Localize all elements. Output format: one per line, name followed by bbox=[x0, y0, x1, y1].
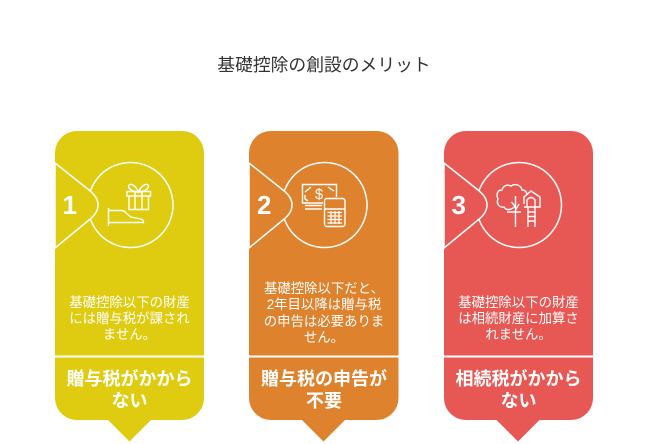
description 1: 基礎控除以下の財産 bbox=[69, 294, 190, 310]
description 3: 基礎控除以下の財産 bbox=[458, 294, 579, 310]
description 2 bbox=[264, 281, 384, 345]
number 3: 3 bbox=[452, 190, 466, 220]
description 3 bbox=[458, 294, 579, 342]
heading 3 bbox=[456, 368, 582, 411]
description 2: の申告は必要ありま bbox=[264, 314, 384, 329]
number 2: 2 bbox=[257, 190, 271, 220]
description 3: は相続財産に加算さ bbox=[458, 311, 579, 326]
heading 2: 不要 bbox=[306, 391, 342, 411]
heading 1: 贈与税がかから bbox=[66, 368, 192, 388]
heading 1 bbox=[66, 368, 192, 411]
number 1: 1 bbox=[62, 190, 77, 220]
icon: dollar sign: $ bbox=[315, 186, 324, 203]
icon: gift on hand bbox=[108, 184, 150, 226]
description 1: には贈与税が課され bbox=[69, 311, 190, 326]
icon: money and calculator bbox=[302, 184, 345, 226]
heading 3: ない bbox=[500, 391, 536, 411]
heading 2 bbox=[261, 368, 387, 411]
title: 基礎控除の創設のメリット bbox=[217, 55, 431, 75]
description 3: れません。 bbox=[485, 327, 552, 342]
description 2: せん。 bbox=[304, 330, 344, 345]
icon: tree and tree house bbox=[497, 185, 540, 227]
heading 1: ない bbox=[112, 391, 148, 411]
heading 3: 相続税がかから bbox=[456, 368, 582, 388]
description 1: ません。 bbox=[103, 327, 156, 342]
description 2: 基礎控除以下だと、 bbox=[264, 281, 384, 296]
heading 2: 贈与税の申告が bbox=[261, 368, 387, 388]
description 1 bbox=[69, 294, 190, 342]
description 2: 2年目以降は贈与税 bbox=[267, 297, 381, 312]
